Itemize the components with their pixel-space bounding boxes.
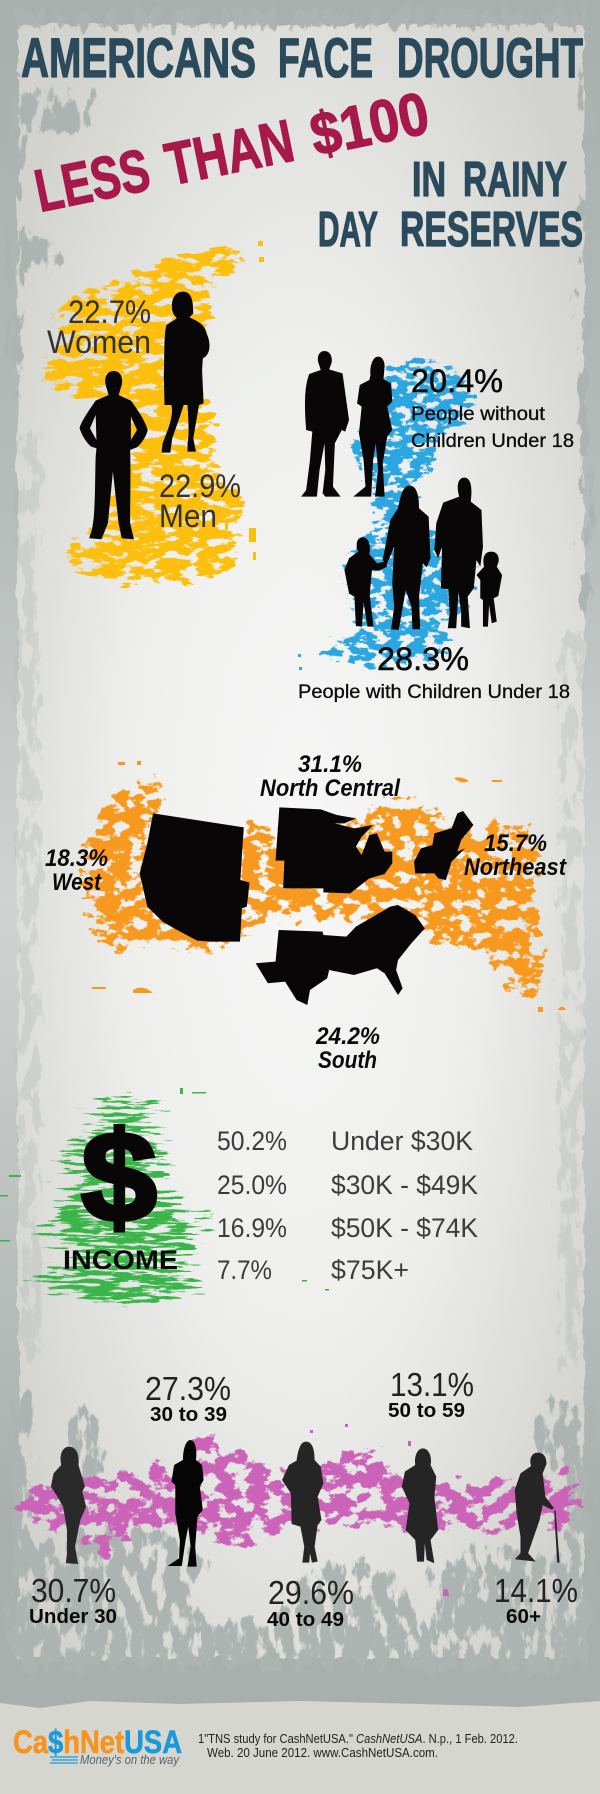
south stat: [315, 1023, 380, 1074]
stat: 30 to 39: [145, 1370, 231, 1426]
row 3: 16.9%: [217, 1213, 287, 1243]
child right: [476, 552, 502, 627]
18.3%: 18.3%: [45, 845, 108, 872]
without children stat: [411, 363, 574, 452]
22.7%: 22.7%: [68, 294, 151, 330]
region: west: [140, 813, 250, 942]
icon: dollar sign: $: [81, 1106, 157, 1249]
headline: less than $100: LESS: [29, 136, 155, 225]
north central stat: [260, 751, 401, 802]
blue splatter: [307, 352, 485, 676]
blue stray dots: [298, 654, 302, 670]
south label: South: [318, 1047, 377, 1074]
title line 3: DAY: [318, 203, 378, 257]
region: north central: [276, 807, 392, 893]
green stray dots: [0, 1088, 329, 1290]
under 30 label: Under 30: [29, 1606, 117, 1628]
logo: [13, 1724, 182, 1767]
30 to 39 label: 30 to 39: [150, 1404, 227, 1426]
child left: [344, 537, 387, 627]
panel: age: [8, 1366, 593, 1631]
citation line 2: Web. 20 June 2012. www.CashNetUSA.com.: [207, 1746, 438, 1760]
panel: gender: [32, 225, 266, 593]
20.4%: 20.4%: [411, 363, 503, 399]
footer: [13, 1724, 518, 1767]
stat: under 30: [29, 1572, 117, 1628]
row 2: 25.0%: [217, 1170, 287, 1200]
pink splatter: [8, 1418, 593, 1567]
28.3%: 28.3%: [377, 641, 469, 677]
50 to 59 label: 50 to 59: [388, 1400, 465, 1422]
northeast stat: [464, 830, 567, 881]
income label: INCOME: [63, 1245, 178, 1275]
logo tagline: Money's on the way: [80, 1752, 180, 1767]
panel: children: [298, 351, 574, 703]
icon: woman: [161, 292, 209, 453]
region: south: [256, 905, 425, 1005]
stat: 60+: [494, 1572, 578, 1628]
with children stat: [298, 641, 570, 703]
man: [434, 478, 483, 628]
60+ label: 60+: [506, 1606, 541, 1628]
woman: [383, 486, 431, 630]
row 1: 50.2%: [217, 1126, 287, 1156]
woman: [353, 357, 392, 497]
title line 1: AMERICANS: [21, 26, 256, 89]
man: [301, 351, 349, 497]
logo speed lines: [50, 1757, 78, 1763]
22.9%: 22.9%: [159, 468, 241, 504]
orange splatter: [72, 764, 557, 1011]
row 4: [217, 1255, 409, 1285]
stat: 40 to 49: [267, 1574, 354, 1631]
27.3%: 27.3%: [145, 1370, 231, 1407]
panel: income: [0, 1086, 478, 1312]
15.7%: 15.7%: [484, 830, 547, 857]
person: 50 to 59: [402, 1448, 438, 1563]
title: [21, 26, 583, 257]
yellow splatter: [32, 225, 266, 593]
row 2: $30K - $49K: [331, 1170, 478, 1200]
stat: 50 to 59: [388, 1366, 474, 1422]
row 2: [217, 1170, 478, 1200]
title line 1: FACE: [278, 26, 373, 89]
headline: less than $100: [29, 79, 435, 225]
row 4: 7.7%: [217, 1255, 272, 1285]
green splatter: [8, 1086, 230, 1312]
headline: less than $100: THAN: [160, 107, 299, 198]
men stat: [159, 468, 241, 534]
24.2%: 24.2%: [315, 1023, 380, 1050]
14.1%: 14.1%: [494, 1572, 578, 1609]
row 4: $75K+: [331, 1255, 409, 1285]
row 1: [217, 1126, 473, 1156]
person: under 30: [51, 1447, 86, 1564]
map of US: [140, 807, 473, 1005]
footer band: [0, 1701, 600, 1794]
west stat: [45, 845, 108, 896]
title line 1: [21, 26, 583, 89]
row 3: [217, 1213, 478, 1243]
people without children label: People without: [411, 404, 546, 425]
person: 30 to 39: [168, 1440, 204, 1567]
silhouettes: [51, 1440, 560, 1567]
panel: regions: [45, 751, 567, 1074]
yellow stray dots: [225, 241, 264, 560]
pink stray dots: [310, 1424, 449, 1596]
row 3: $50K - $74K: [331, 1213, 478, 1243]
women label: Women: [47, 324, 151, 360]
29.6%: 29.6%: [268, 1574, 354, 1611]
title line 2: [412, 153, 567, 207]
west label: West: [52, 869, 102, 896]
person: 40 to 49: [282, 1442, 323, 1563]
headline: less than $100: $100: [305, 79, 435, 169]
40 to 49 label: 40 to 49: [267, 1609, 344, 1631]
men label: Men: [159, 498, 217, 534]
icon: man: [80, 371, 148, 539]
north central label: North Central: [260, 775, 401, 802]
women stat: [47, 294, 151, 360]
title line 2: IN: [412, 153, 446, 207]
people with children label: People with Children Under 18: [298, 682, 570, 703]
northeast label: Northeast: [464, 854, 567, 881]
citation line 1: 1"TNS study for CashNetUSA." CashNetUSA. N.p., 1 Feb. 2012.: [198, 1732, 518, 1746]
region: northeast: [414, 811, 473, 880]
person: 60+ with cane: [515, 1453, 560, 1563]
citation: [198, 1732, 518, 1760]
faint side texture: [10, 420, 590, 1380]
orange stray dots: [92, 761, 566, 1012]
logo wordmark: Ca$hNetUSA: [13, 1724, 182, 1760]
31.1%: 31.1%: [298, 751, 362, 778]
income table: [217, 1126, 478, 1285]
title line 3: [318, 203, 583, 257]
13.1%: 13.1%: [390, 1366, 474, 1403]
row 1: Under $30K: [331, 1126, 473, 1156]
30.7%: 30.7%: [31, 1572, 116, 1609]
icon: family: [344, 478, 502, 630]
icon: couple without children: [301, 351, 392, 497]
people without children label line 2: Children Under 18: [411, 431, 574, 452]
